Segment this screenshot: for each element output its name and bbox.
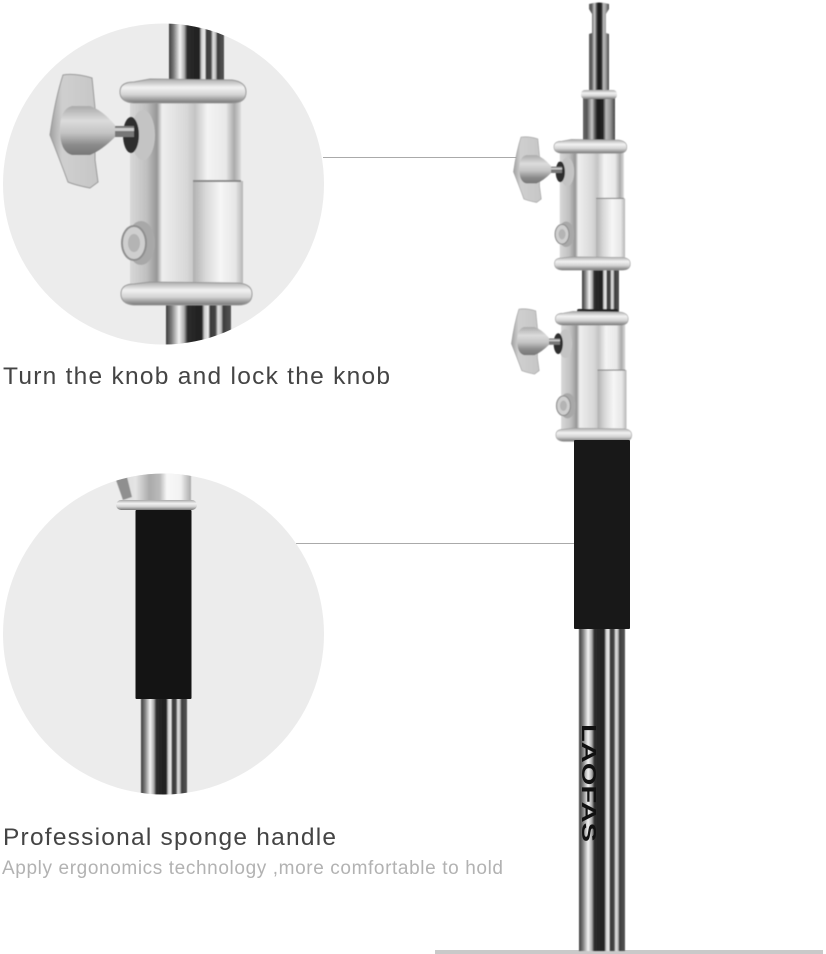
detail foam grip xyxy=(136,510,192,699)
detail locking knob xyxy=(50,74,155,188)
main stand xyxy=(511,2,632,951)
detail lower pole xyxy=(165,304,232,344)
middle section xyxy=(582,268,619,314)
leader line: handle xyxy=(296,542,575,544)
heading: knob: Turn the knob and lock the knob xyxy=(3,363,390,390)
spigot tip xyxy=(589,2,609,92)
caption: handle: Apply ergonomics technology ,more comfortable to hold xyxy=(2,858,503,879)
detail handle clamp stub xyxy=(126,474,192,500)
lower clamp xyxy=(511,309,632,441)
detail clamp bolt fragment xyxy=(116,477,132,500)
base plate xyxy=(435,950,823,954)
detail clamp collar xyxy=(116,500,197,510)
foam grip xyxy=(574,440,630,629)
spigot collar xyxy=(581,90,617,99)
upper section xyxy=(583,96,615,142)
panel: handle detail circle xyxy=(3,470,324,797)
panel: knob detail circle xyxy=(3,20,324,348)
brand text on pole: LAOFAS xyxy=(577,724,599,842)
detail upper pole xyxy=(169,20,224,84)
heading: handle: Professional sponge handle xyxy=(3,824,336,851)
lower pole xyxy=(579,625,625,951)
rubber ring xyxy=(577,309,618,313)
detail clamp body xyxy=(120,79,252,305)
upper clamp xyxy=(514,137,630,270)
leader line: knob xyxy=(323,156,517,158)
detail handle pole xyxy=(141,695,187,797)
